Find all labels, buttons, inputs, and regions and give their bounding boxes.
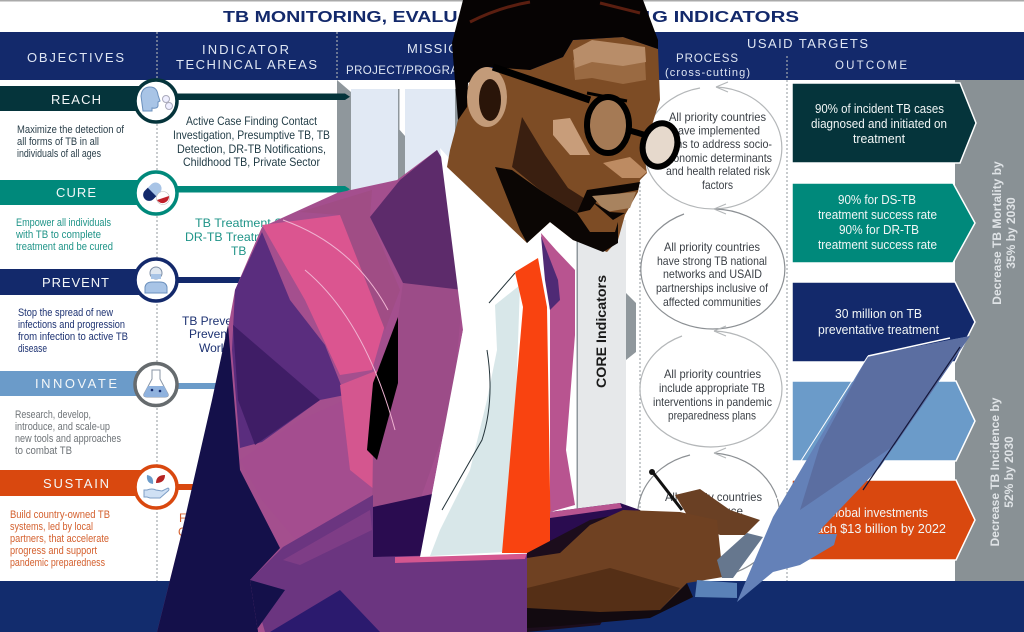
indicator technical areas text: Workers (199, 341, 243, 355)
title: G INDICATORS (652, 9, 799, 26)
objective: sustain: Build country-owned TB (10, 509, 110, 521)
indicator technical areas text: TB Treatment Success, (195, 216, 325, 230)
process text: All priority countries (665, 490, 762, 504)
outcome arrow: sustain: reach $13 billion by 2022 (805, 522, 946, 536)
icon: coughing head (135, 80, 177, 122)
header band: TECHINCAL AREAS (176, 57, 317, 72)
outcome arrow: innovate (792, 381, 975, 461)
process text: affected communities (663, 295, 761, 309)
process text: All priority countries (664, 240, 760, 254)
header band: PROCESS (676, 53, 738, 65)
outcome arrow: cure (792, 183, 975, 263)
objective: sustain: SUSTAIN (43, 476, 109, 491)
impact column: 35% by 2030 (1004, 197, 1018, 269)
header band: (cross-cutting) (665, 67, 750, 79)
objective: sustain (0, 466, 225, 569)
objective: prevent (0, 259, 295, 355)
tie (502, 258, 551, 553)
shirt (420, 148, 575, 557)
outcome arrow: prevent: preventative treatment (818, 323, 940, 337)
objective: innovate: to combat TB (15, 445, 72, 457)
outcome arrow: reach: treatment (853, 132, 906, 146)
icon: health worker (135, 259, 177, 301)
objective: reach: all forms of TB in all (17, 136, 99, 148)
process text: and health related risk (666, 164, 771, 178)
objective: reach (0, 80, 350, 160)
process cycle ellipses (638, 82, 785, 577)
icon: pills (135, 172, 177, 214)
indicator technical areas text: Detection, DR-TB Notifications, (177, 142, 326, 156)
objective: cure: with TB to complete (15, 229, 101, 241)
outcome arrow: prevent: 30 million on TB (835, 307, 922, 321)
core indicators panel (576, 220, 636, 525)
objective: cure: treatment and be cured (16, 241, 113, 253)
icon: hand with leaves (135, 466, 177, 508)
process text: networks and USAID (663, 267, 762, 281)
indicator technical areas text: Active Case Finding Contact (186, 114, 318, 128)
indicator technical areas text: DR-TB Treatment Success, (185, 230, 335, 244)
indicator technical areas text: TB (231, 244, 246, 258)
objective: cure: Empower all individuals (16, 217, 111, 229)
laptop (695, 336, 970, 602)
header band: PROJECT/PROGRAM (346, 65, 468, 77)
header band: MISSION (407, 41, 469, 56)
indicator technical areas text: Investigation, Presumptive TB, TB (173, 128, 330, 142)
objective: innovate: introduce, and scale-up (15, 421, 110, 433)
header band: OUTCOME (835, 60, 907, 72)
outcome arrow: reach: diagnosed and initiated on (811, 117, 947, 131)
objective: sustain: systems, led by local (10, 521, 93, 533)
footer band (0, 581, 1024, 632)
jacket right panel (541, 233, 575, 512)
sleeve and cuff (527, 503, 640, 560)
impact column: 52% by 2030 (1002, 436, 1016, 508)
indicator technical areas text: Childhood TB, Private Sector (183, 155, 320, 169)
objective: reach: individuals of all ages (17, 148, 101, 160)
impact column (955, 80, 1024, 581)
objective: reach: Maximize the detection of (17, 124, 125, 136)
objective: innovate: Research, develop, (15, 409, 91, 421)
process text: factors (702, 178, 733, 192)
process text: plans to address socio- (662, 137, 772, 151)
ear (467, 67, 507, 127)
head (447, 0, 682, 252)
process text: economic determinants (662, 151, 772, 165)
objective: prevent: from infection to active TB (18, 331, 128, 343)
title (223, 9, 799, 26)
outcome arrow: cure: treatment success rate (818, 208, 937, 222)
title: TB MONITORING, EVALUATION (223, 9, 517, 26)
process text (653, 110, 772, 518)
outcome arrow: sustain: Global investments (826, 506, 928, 520)
impact column: Decrease TB Incidence by (988, 397, 1002, 546)
header band (0, 32, 1024, 80)
objective: innovate: new tools and approaches (15, 433, 121, 445)
outcome arrow: cure: treatment success rate (818, 238, 937, 252)
objective: sustain: progress and support (10, 545, 97, 557)
indicator technical areas text (173, 114, 335, 539)
header band: INDICATOR (202, 42, 289, 57)
objective: sustain: pandemic preparedness (10, 557, 105, 569)
process text: have strong TB national (657, 254, 767, 268)
objective: prevent: disease (18, 343, 47, 355)
process text: interventions in pandemic (653, 395, 772, 409)
process text: preparedness plans (668, 408, 756, 422)
objective: cure: CURE (56, 185, 96, 200)
objective: prevent: PREVENT (42, 275, 109, 290)
icon: flask (135, 364, 177, 406)
outcome arrow: reach: 90% of incident TB cases (815, 102, 944, 116)
title: AND REPORTIN (520, 9, 650, 26)
indicator technical areas text: Financing, (179, 511, 234, 525)
header band: OBJECTIVES (27, 50, 124, 65)
indicator technical areas text: Governance (178, 525, 244, 539)
jacket (157, 150, 527, 632)
impact column: Decrease TB Mortality by (990, 161, 1004, 305)
header band: USAID TARGETS (747, 36, 868, 51)
objective: prevent: infections and progression (18, 319, 125, 331)
illustration: man at laptop (157, 0, 970, 632)
outcome arrow: cure: 90% for DS-TB (838, 193, 916, 207)
outcome arrow: reach (792, 83, 976, 163)
objective: cure (0, 172, 350, 253)
objective: prevent: Stop the spread of new (18, 307, 113, 319)
outcome arrow: prevent (792, 282, 975, 362)
indicator technical areas text: Preventive (189, 327, 246, 341)
hands (527, 469, 760, 628)
objective: reach: REACH (51, 92, 101, 107)
process text: have implemented (672, 124, 760, 138)
hair (452, 0, 658, 120)
objective: innovate: INNOVATE (35, 376, 117, 391)
outcome arrow: sustain (792, 480, 975, 560)
process text: introduce (695, 504, 743, 518)
objective: sustain: partners, that accelerate (10, 533, 109, 545)
mission columns panel (337, 80, 461, 520)
process text: partnerships inclusive of (656, 281, 769, 295)
outcome arrow: cure: 90% for DR-TB (839, 223, 919, 237)
process text: include appropriate TB (659, 381, 765, 395)
process text: All priority countries (664, 367, 761, 381)
objective: innovate (0, 364, 235, 457)
indicator technical areas text: TB Prevention, (182, 314, 261, 328)
glasses (493, 67, 682, 171)
process text: All priority countries (669, 110, 766, 124)
core indicators panel: CORE Indicators (594, 275, 609, 388)
